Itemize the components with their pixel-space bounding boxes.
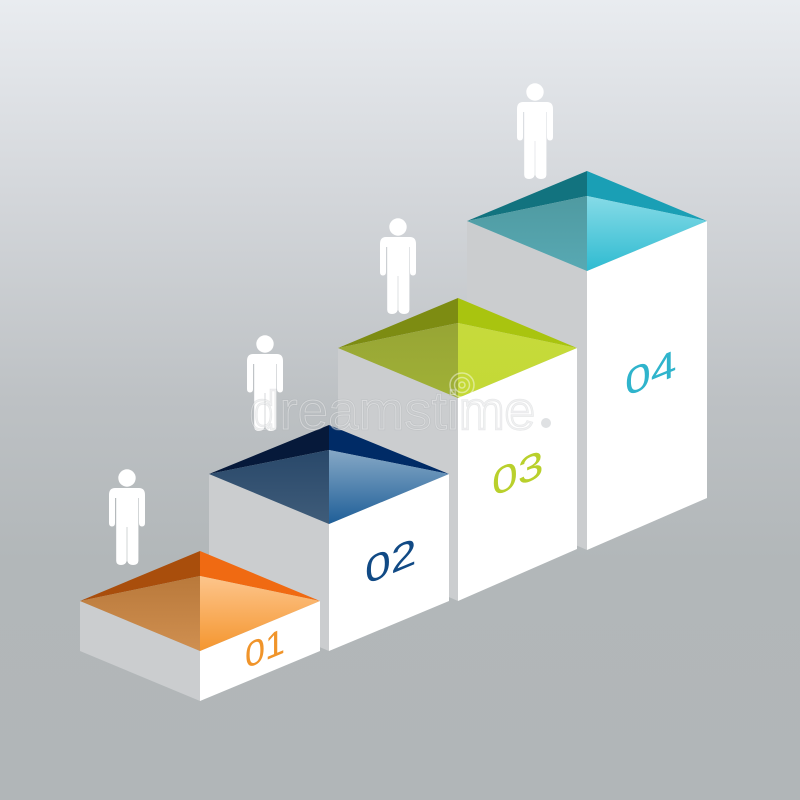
step 02 right face — [329, 474, 449, 651]
step 02 top — [209, 425, 449, 524]
icon: person on step 02 — [247, 335, 283, 431]
step 04 top — [467, 171, 707, 271]
step 02 — [209, 425, 449, 651]
step 03 top — [338, 298, 577, 398]
step 03 left face — [338, 348, 458, 601]
step 04 — [467, 171, 707, 550]
step 02 left face — [209, 474, 329, 651]
icon: person on step 01 — [109, 469, 145, 565]
step 03 — [338, 298, 577, 601]
icon: person on step 04 — [517, 83, 553, 179]
step 01 number: 01 — [245, 620, 285, 677]
icon: person on step 03 — [380, 218, 416, 314]
step 03 number: 03 — [492, 442, 544, 506]
step 01 top — [80, 551, 320, 651]
step 04 number: 04 — [625, 342, 677, 406]
watermark: dreamstime — [249, 381, 535, 441]
step 03 right face — [458, 348, 577, 601]
step 04 left face — [467, 221, 587, 550]
step 01 — [80, 551, 320, 701]
step 01 right face — [200, 601, 320, 701]
step 01 left face — [80, 601, 200, 701]
step 04 right face — [587, 221, 707, 550]
watermark: dreamstime — [249, 381, 535, 441]
step 02 number: 02 — [365, 530, 417, 594]
